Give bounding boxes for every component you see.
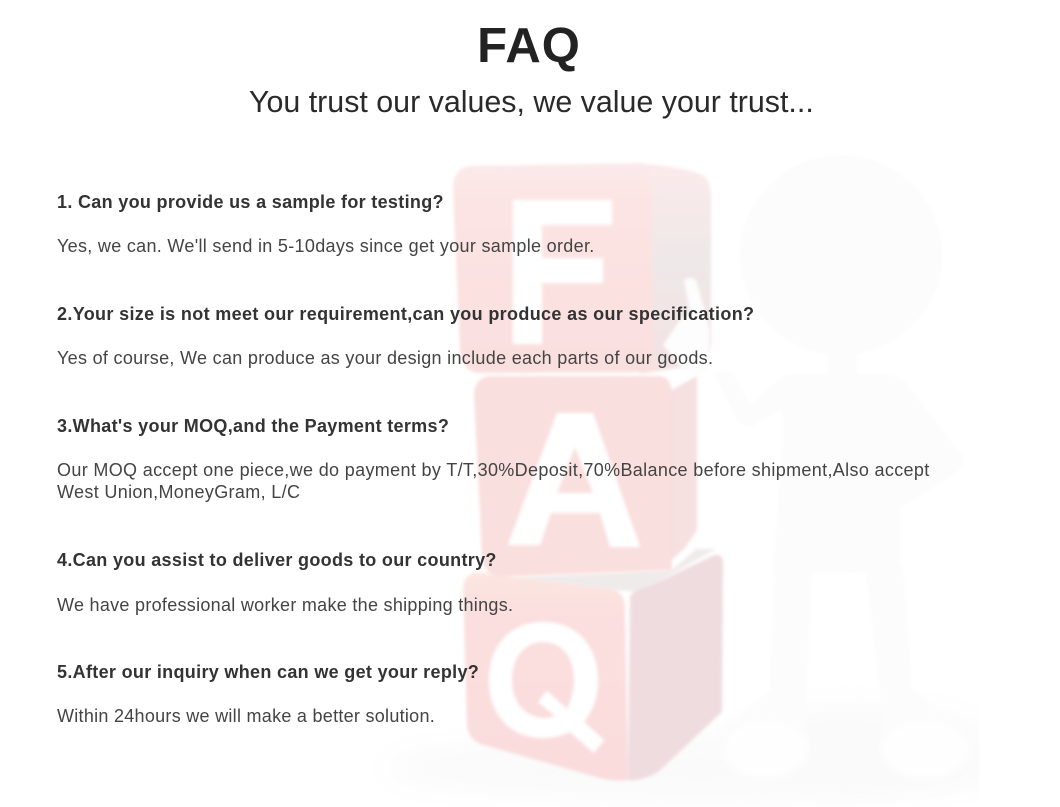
question 3: 3.What's your MOQ,and the Payment terms? <box>57 416 449 436</box>
question 4: 4.Can you assist to deliver goods to our country? <box>57 550 497 570</box>
answer 2: Yes of course, We can produce as your design include each parts of our goods. <box>57 348 713 368</box>
figure feet <box>724 722 970 778</box>
letter Q <box>489 622 604 753</box>
cube F <box>453 163 711 374</box>
answer 1: Yes, we can. We'll send in 5-10days since get your sample order. <box>57 236 595 256</box>
letter A <box>508 413 640 547</box>
answer 3: West Union,MoneyGram, L/C <box>57 482 300 502</box>
answer 3: Our MOQ accept one piece,we do payment by T/T,30%Deposit,70%Balance before shipment,Also accept <box>57 460 930 480</box>
question 5: 5.After our inquiry when can we get your reply? <box>57 662 479 682</box>
figure head <box>740 155 942 355</box>
question 1: 1. Can you provide us a sample for testing? <box>57 192 444 212</box>
figure neck <box>828 345 857 380</box>
cube Q <box>463 549 723 781</box>
background illustration: cubes and figure <box>452 162 724 782</box>
question 2: 2.Your size is not meet our requirement,can you produce as our specification? <box>57 304 754 324</box>
hand of figure <box>663 278 710 373</box>
answer 5: Within 24hours we will make a better solution. <box>57 706 435 726</box>
figure <box>713 155 970 750</box>
figure torso and arms <box>713 372 962 573</box>
subtitle: You trust our values, we value your trust... <box>249 85 814 119</box>
title: FAQ <box>477 19 581 73</box>
letter F <box>513 200 612 344</box>
answer 4: We have professional worker make the shipping things. <box>57 595 513 615</box>
floor shadow <box>380 703 1020 802</box>
cube A <box>474 376 697 577</box>
answer 3 <box>57 460 930 502</box>
figure legs <box>723 565 812 750</box>
